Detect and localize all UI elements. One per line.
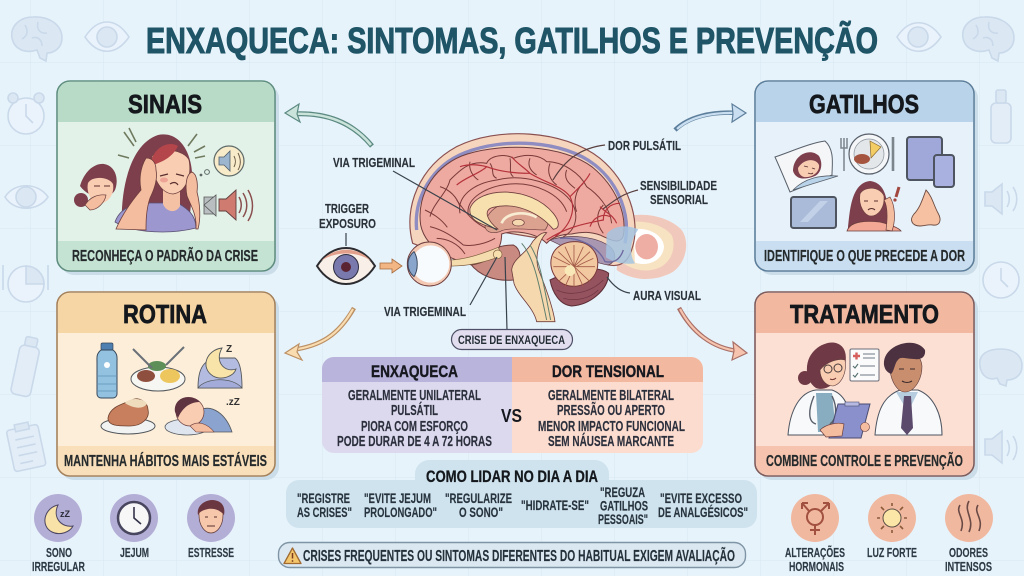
warning banner [278, 542, 746, 568]
arrow: to gatilhos [675, 104, 746, 130]
icon: hormonal changes [791, 494, 839, 542]
label: via trigeminal lower: VIA TRIGEMINAL [384, 304, 466, 319]
optic nerve [448, 247, 502, 266]
panel: gatilhos [755, 81, 978, 275]
label: trigger exposure: TRIGGER [325, 201, 369, 216]
arrow: to sinais [285, 104, 372, 146]
icon: intense odors [945, 494, 993, 542]
label: sensibilidade sensorial [640, 178, 717, 207]
panel: tratamento [755, 292, 978, 480]
cerebellum [551, 242, 598, 286]
icon: medical chart [850, 349, 879, 381]
column: dor tensional: GERALMENTE BILATERAL [548, 388, 674, 404]
tip: registre: "REGISTRE [297, 491, 350, 506]
icon: warning triangle [284, 548, 301, 564]
column: dor tensional: PRESSÃO OU APERTO [557, 401, 665, 419]
label: trigger exposure: EXPOSURO [319, 216, 376, 231]
tip: regularize: O SONO" [459, 505, 503, 520]
heading: como lidar: COMO LIDAR NO DIA A DIA [426, 468, 598, 486]
icon: moon over pillow [198, 344, 242, 388]
label: trigger exposure [319, 201, 376, 231]
label: sensibilidade sensorial: SENSORIAL [650, 192, 708, 207]
skull outline [410, 134, 635, 266]
cerebrum [420, 147, 624, 265]
tentorium [550, 237, 615, 265]
panel: rotina [57, 292, 279, 480]
column: dor tensional [512, 357, 703, 453]
tip: regularize [445, 491, 512, 520]
icon: roast chicken [101, 399, 155, 434]
heading: rotina: ROTINA [123, 299, 207, 329]
label: odores intensos: ODORES [949, 546, 988, 560]
thalamus [485, 201, 548, 233]
tip: evite jejum: PROLONGADO" [364, 505, 437, 520]
column: dor tensional: SEM NÁUSEA MARCANTE [548, 433, 674, 450]
aura overlay [606, 226, 638, 264]
brainstem [512, 233, 555, 322]
eye exposure icon [317, 248, 375, 284]
meninges [416, 143, 626, 243]
aura back [617, 215, 686, 279]
icon: nose [912, 190, 940, 226]
icon: plate with meal [131, 347, 185, 391]
tip: evite jejum [364, 491, 437, 520]
label: sono irregular [32, 546, 85, 574]
background icons: right column [897, 17, 1022, 463]
label: odores intensos [945, 546, 992, 574]
pill: crise de enxaqueca: CRISE DE ENXAQUECA [458, 335, 565, 347]
label: estresse: ESTRESSE [188, 546, 234, 560]
cerebellum dark [550, 269, 609, 306]
icon: tablet and phone [907, 137, 954, 187]
label: aura visual: AURA VISUAL [633, 288, 701, 303]
warning banner: CRISES FREQUENTES OU SINTOMAS DIFERENTES DO HABITUAL EXIGEM AVALIAÇÃO [303, 547, 735, 565]
background icons: left column [3, 17, 129, 472]
gyri [425, 155, 612, 254]
label: alteracoes hormonais: ALTERAÇÕES [785, 545, 845, 560]
label: sono irregular: SONO [46, 546, 72, 560]
icon: fasting clock [110, 494, 158, 542]
column: enxaqueca: PIORA COM ESFORÇO [361, 419, 468, 435]
label: sono irregular: IRREGULAR [32, 560, 85, 574]
panel: como lidar [286, 460, 757, 528]
label: alteracoes hormonais: HORMONAIS [789, 560, 844, 574]
column: enxaqueca: PODE DURAR DE 4 A 72 HORAS [337, 434, 492, 450]
label: luz forte: LUZ FORTE [867, 546, 917, 560]
label: alteracoes hormonais [785, 545, 845, 574]
tip: evite jejum: "EVITE JEJUM [364, 491, 431, 506]
icon: clipboard in hands [820, 402, 870, 438]
tip: regularize: "REGULARIZE [445, 491, 512, 506]
column: dor tensional: MENOR IMPACTO FUNCIONAL [538, 419, 685, 435]
label: jejum: JEJUM [120, 546, 149, 560]
icon: male doctor [875, 343, 942, 435]
icon: bright light [868, 494, 916, 542]
tip: reduza gatilhos: PESSOAIS" [598, 512, 648, 527]
icon: sleeping person [165, 397, 240, 435]
icon: moon over pillow: Z [226, 344, 232, 355]
tip: reduza gatilhos: "REGUZA [600, 485, 645, 500]
tip: evite excesso: DE ANALGÉSICOS" [658, 505, 748, 520]
lower brain [470, 245, 520, 280]
column: enxaqueca [322, 357, 512, 453]
heading: tratamento: TRATAMENTO [790, 299, 939, 329]
vs badge: VS [501, 406, 522, 426]
caption: rotina: MANTENHA HÁBITOS MAIS ESTÁVEIS [64, 453, 267, 470]
icon: woman with headache [115, 128, 205, 232]
leader lines [346, 145, 638, 330]
tip: reduza gatilhos [598, 485, 648, 527]
pill: crise de enxaqueca [452, 330, 572, 350]
icon: nauseous child [74, 164, 117, 210]
heading: gatilhos: GATILHOS [809, 89, 919, 119]
arrow: eye to brain [380, 259, 402, 273]
column: enxaqueca: ENXAQUECA [371, 363, 458, 381]
label: sensibilidade sensorial: SENSIBILIDADE [640, 178, 717, 193]
icon: female doctor [788, 342, 850, 435]
icon: horizontal tablet [791, 197, 836, 228]
tip: registre: AS CRISES" [297, 505, 352, 520]
label: dor pulsatil: DOR PULSÁTIL [608, 138, 681, 153]
tip: registre [297, 491, 352, 520]
caption: sinais: RECONHEÇA O PADRÃO DA CRISE [72, 247, 258, 265]
comparison table [322, 357, 703, 453]
arrow: to rotina [285, 308, 354, 360]
label: odores intensos: INTENSOS [945, 560, 992, 574]
column: enxaqueca: PULSÁTIL [391, 402, 438, 419]
eyeball [407, 242, 451, 286]
icon: plate with fork and knife [841, 134, 893, 174]
icon: woman with hand on head [847, 181, 901, 231]
icon: sound bubble [200, 146, 244, 176]
icon: sleeper on pillow [775, 141, 838, 192]
corpus callosum [470, 192, 558, 229]
occipital vessels [560, 238, 623, 262]
tip: reduza gatilhos: GATILHOS [600, 498, 648, 514]
brain diagram [407, 134, 686, 322]
tip: evite excesso [658, 491, 748, 520]
panel: sinais [57, 81, 279, 275]
icon: stress face [187, 494, 235, 542]
label: via trigeminal upper: VIA TRIGEMINAL [333, 155, 415, 170]
tip: evite excesso: "EVITE EXCESSO [660, 491, 742, 506]
tip: hidrate-se: "HIDRATE-SE" [521, 498, 589, 513]
arrow: to tratamento [679, 308, 747, 360]
icon: irregular sleep [34, 494, 82, 542]
heading: sinais: SINAIS [128, 89, 202, 119]
icon: loud speaker [204, 190, 252, 221]
column: enxaqueca: GERALMENTE UNILATERAL [348, 388, 481, 404]
icon: irregular sleep: zZ [60, 509, 70, 519]
icon: sleeping person: .zZ [226, 397, 240, 408]
icon: water bottle [97, 343, 117, 398]
column: dor tensional: DOR TENSIONAL [552, 363, 664, 381]
